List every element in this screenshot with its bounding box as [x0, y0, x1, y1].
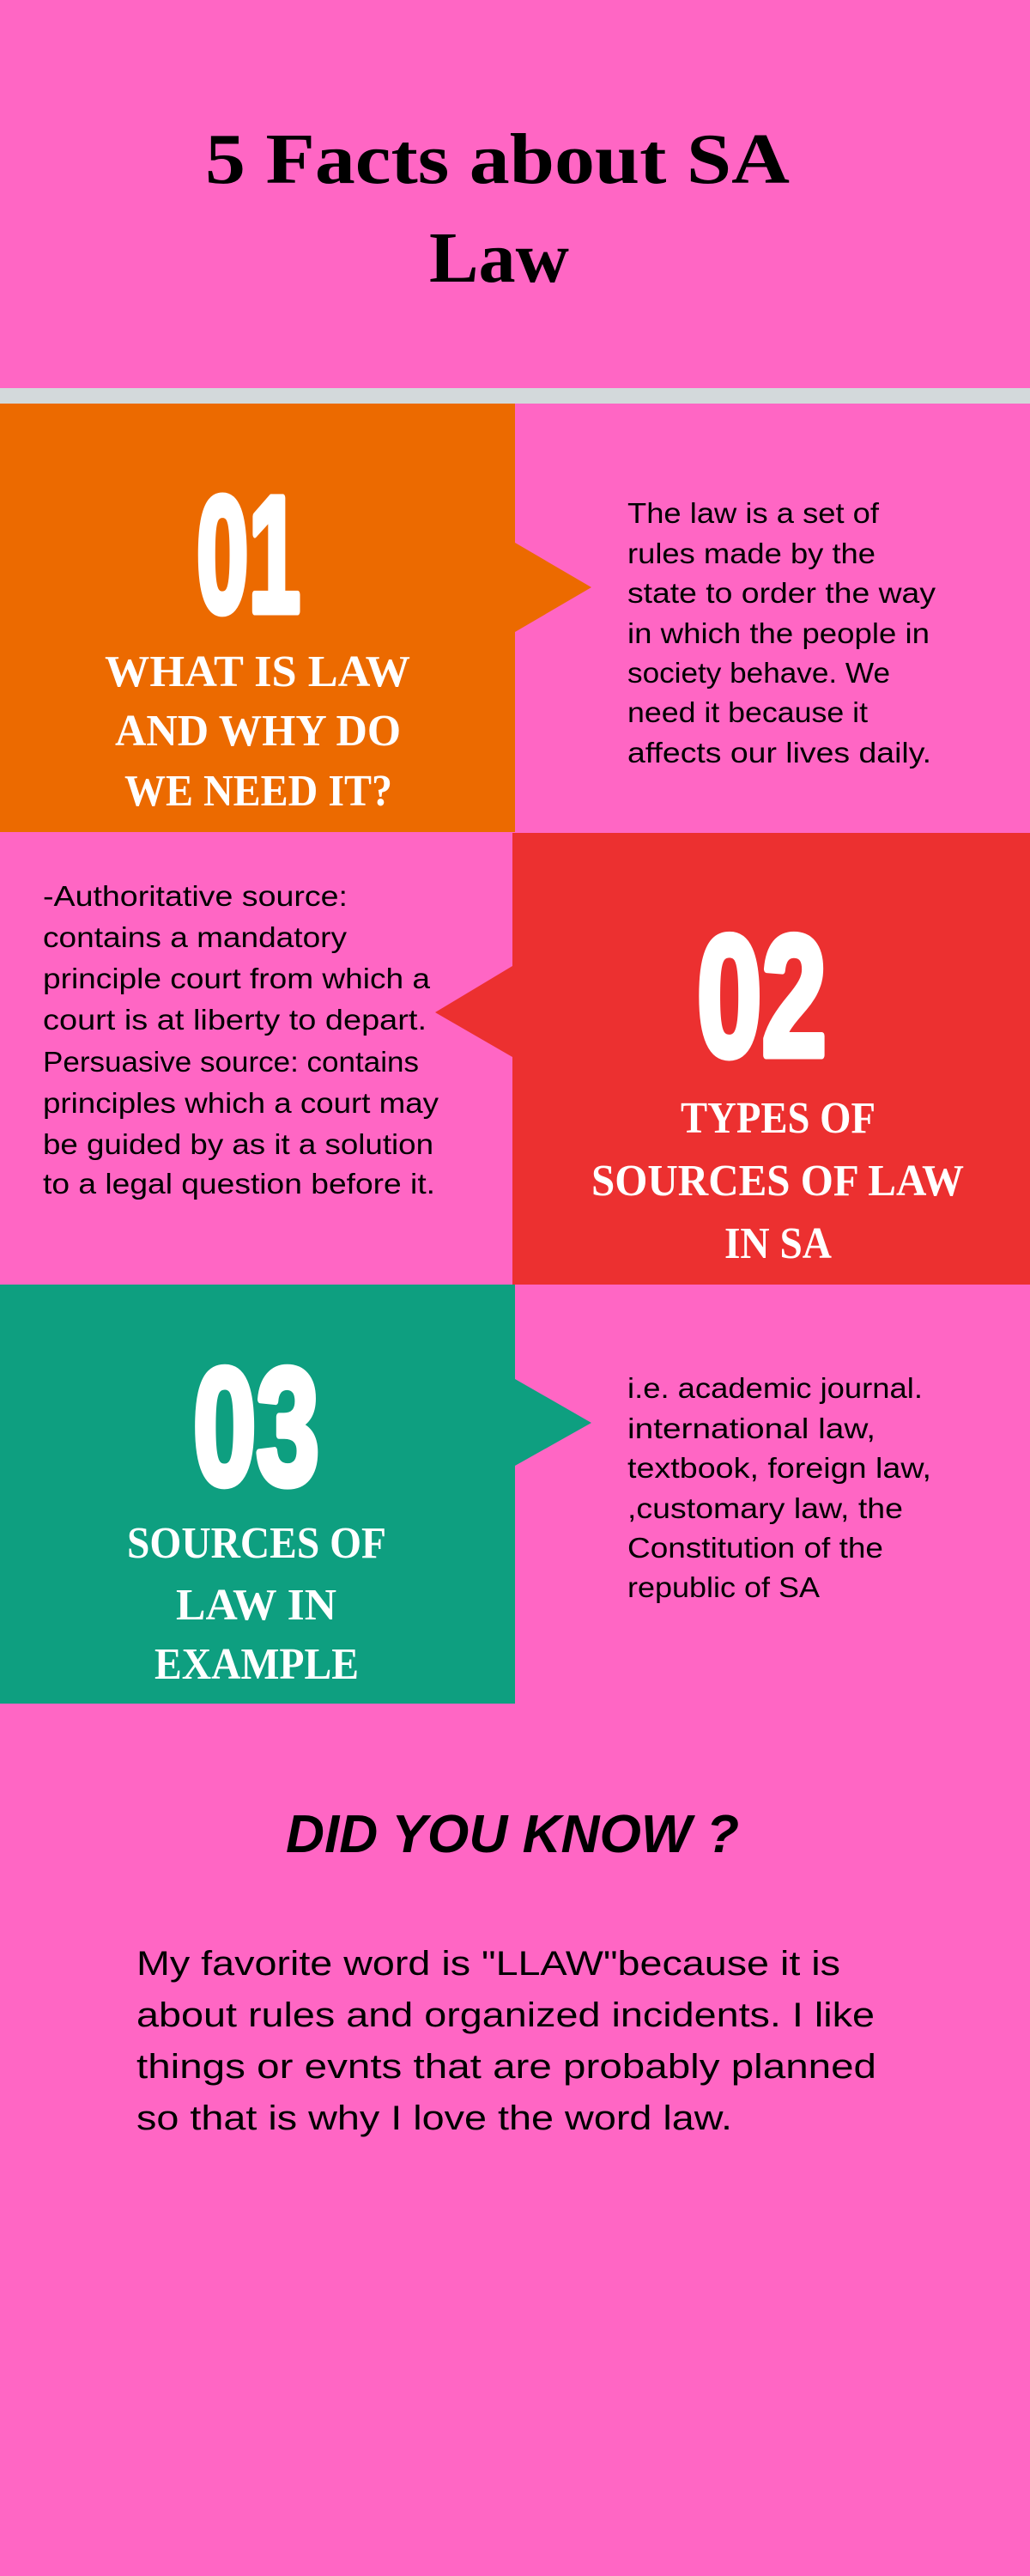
text 02: court is at liberty to depart. [43, 1004, 427, 1036]
text: favorite word paragraph: about rules and organized incidents. I like [136, 1996, 875, 2034]
number 03: 03 [193, 1334, 319, 1519]
heading 01: WE NEED IT? [124, 767, 392, 816]
text 02: principle court from which a [43, 963, 431, 994]
text 01: The law is a set of [627, 497, 880, 529]
text 03: international law, [627, 1413, 876, 1444]
text 02: be guided by as it a solution [43, 1128, 433, 1160]
text 02: contains a mandatory [43, 921, 348, 953]
red box with arrow [435, 833, 1030, 1285]
heading: did you know: DID YOU KNOW ? [286, 1805, 739, 1864]
title [205, 119, 790, 298]
heading 02: IN SA [724, 1219, 832, 1268]
text 03: ,customary law, the [627, 1492, 903, 1524]
title: Law [429, 218, 569, 298]
heading 03: EXAMPLE [154, 1640, 359, 1689]
heading 01 [105, 647, 410, 816]
heading 01: AND WHY DO [115, 707, 401, 756]
text: favorite word paragraph: things or evnts that are probably planned [136, 2048, 876, 2086]
text 02: principles which a court may [43, 1087, 439, 1119]
number 02: 02 [697, 901, 827, 1092]
number 01: 01 [197, 462, 300, 647]
text 02: to a legal question before it. [43, 1168, 435, 1200]
text 01: state to order the way [627, 577, 936, 609]
heading 02: TYPES OF [681, 1094, 876, 1143]
text 02: Persuasive source: contains [43, 1046, 419, 1078]
text 03: i.e. academic journal. [627, 1372, 923, 1404]
text 01: in which the people in [627, 617, 930, 649]
panel: 02 types of sources [43, 833, 1030, 1285]
title: 5 Facts about SA [205, 119, 790, 199]
text: favorite word paragraph: so that is why I love the word law. [136, 2099, 732, 2137]
text 01: need it because it [627, 696, 868, 728]
text 03: Constitution of the [627, 1532, 883, 1564]
text 03 [627, 1372, 931, 1603]
heading 01: WHAT IS LAW [105, 647, 410, 696]
panel: 03 sources in example [0, 1285, 931, 1704]
text 03: republic of SA [627, 1571, 820, 1603]
teal box with arrow [0, 1285, 591, 1704]
heading 02: SOURCES OF LAW [591, 1157, 964, 1206]
text 01: affects our lives daily. [627, 737, 931, 769]
orange box with arrow [0, 404, 591, 832]
text 01: society behave. We [627, 657, 890, 689]
heading 03: LAW IN [176, 1581, 336, 1630]
text 03: textbook, foreign law, [627, 1452, 931, 1484]
text 01: rules made by the [627, 538, 876, 569]
text: favorite word paragraph [136, 1945, 876, 2137]
heading 03 [127, 1519, 386, 1689]
heading 02 [591, 1094, 964, 1268]
text 02: -Authoritative source: [43, 880, 348, 912]
text 02 [43, 880, 439, 1200]
text 01 [627, 497, 936, 769]
text: favorite word paragraph: My favorite word is "LLAW"because it is [136, 1945, 840, 1983]
panel: 01 what is law [0, 404, 936, 832]
heading 03: SOURCES OF [127, 1519, 386, 1568]
